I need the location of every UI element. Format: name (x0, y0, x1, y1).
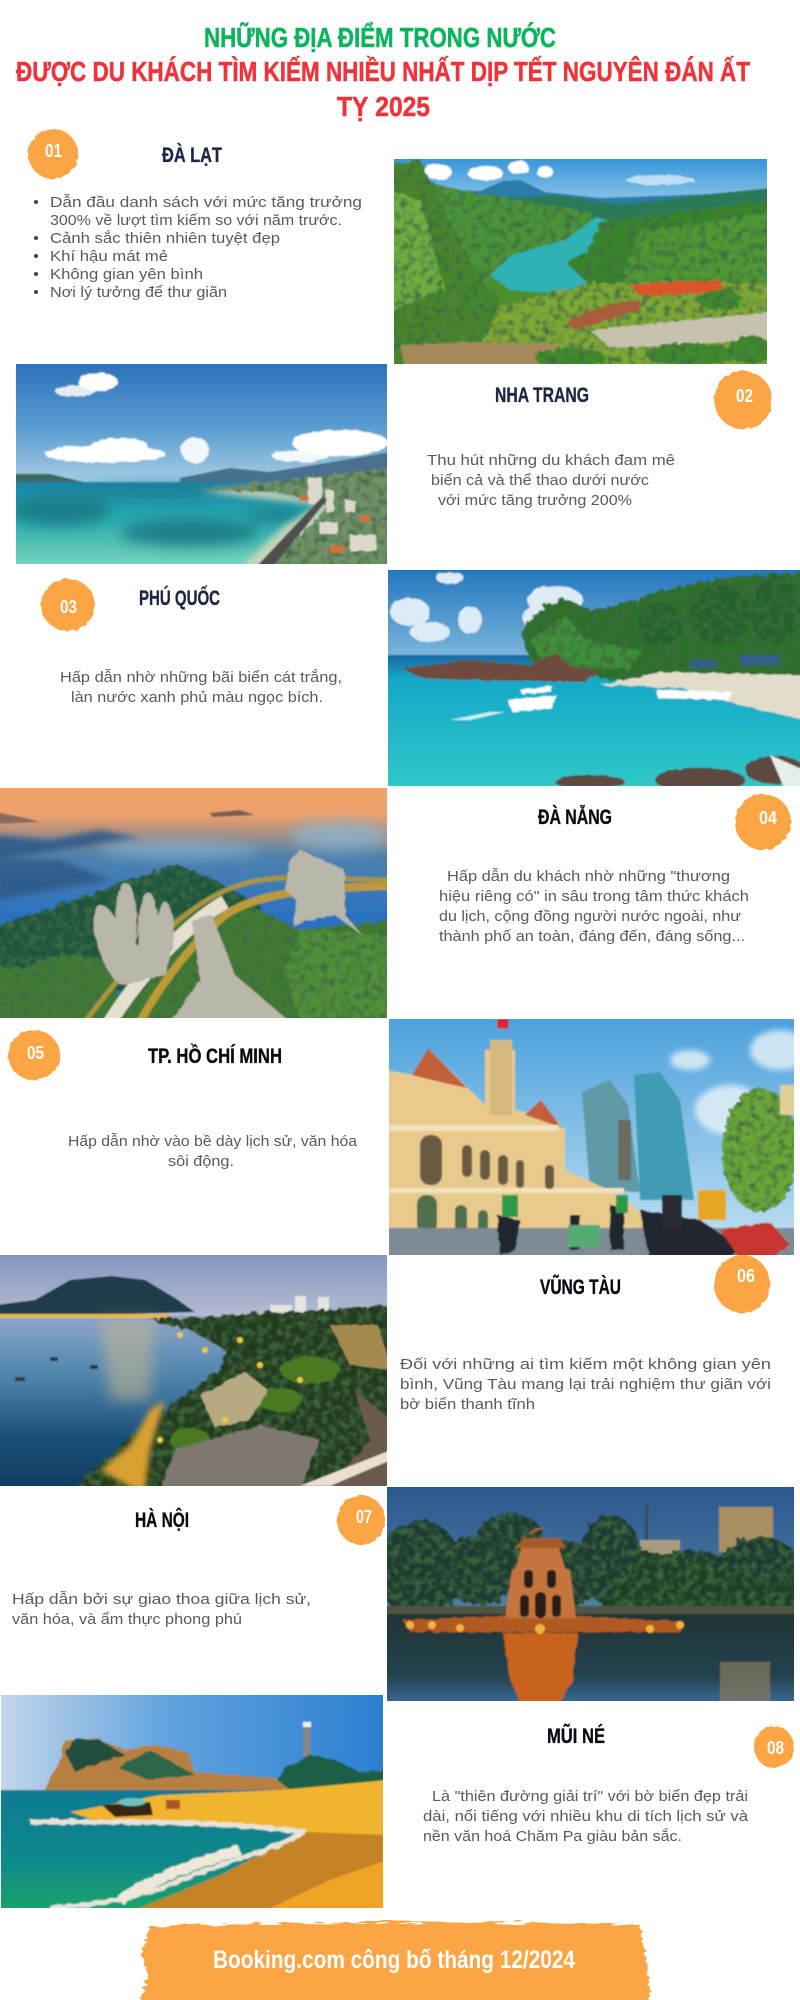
bullet list: Không gian yên bình (50, 267, 203, 283)
panel: Nha Trang (10, 360, 772, 568)
bullet list (34, 194, 362, 301)
badge 04: 04 (759, 808, 777, 828)
photo: City Hall (385, 1015, 800, 1259)
body text (439, 868, 749, 945)
heading TP. Hồ Chí Minh: TP. HỒ CHÍ MINH (148, 1044, 282, 1068)
badge 01: 01 (45, 141, 62, 161)
photo: Vũng Tàu night (0, 1251, 391, 1490)
body text: nền văn hoá Chăm Pa giàu bản sắc. (423, 1828, 682, 1845)
photo: Đà Lạt lake (390, 155, 772, 368)
badge 07 (337, 1495, 385, 1545)
badge 05: 05 (27, 1043, 44, 1063)
body text (60, 669, 342, 706)
bullet list: Nơi lý tưởng để thư giãn (50, 285, 227, 301)
body text: văn hóa, và ẩm thực phong phú (12, 1612, 242, 1628)
photo: Golden Bridge (0, 784, 391, 1022)
heading Mũi Né: MŨI NÉ (547, 1724, 605, 1748)
bullet list: Khí hậu mát mẻ (50, 249, 168, 265)
photo: Mũi Né beach (0, 1691, 387, 1912)
photo: Phú Quốc beach (384, 566, 800, 792)
badge 07: 07 (356, 1507, 372, 1527)
heading Vũng Tàu: VŨNG TÀU (540, 1275, 621, 1299)
body text: với mức tăng trưởng 200% (438, 493, 632, 509)
body text: bình, Vũng Tàu mang lại trải nghiệm thư giãn với (400, 1377, 771, 1393)
footer banner (138, 1922, 650, 2000)
body text: biển cả và thể thao dưới nước (431, 473, 649, 489)
panel: Phú Quốc (41, 566, 800, 792)
badge 02 (714, 371, 772, 429)
badge 06: 06 (737, 1266, 755, 1286)
body text: thành phố an toàn, đáng đến, đáng sống... (439, 929, 745, 945)
body text (12, 1591, 311, 1628)
footer banner: Booking.com công bố tháng 12/2024 (213, 1946, 575, 1974)
body text (427, 453, 675, 509)
panel: Hà Nội (12, 1483, 800, 1705)
heading Đà Nẵng: ĐÀ NẴNG (538, 806, 612, 829)
body text: sôi động. (168, 1154, 234, 1170)
body text: Thu hút những du khách đam mê (427, 453, 675, 469)
body text: làn nước xanh phủ màu ngọc bích. (71, 690, 323, 706)
panel: Mũi Né (0, 1691, 794, 1912)
body text: hiệu riêng có" in sâu trong tâm thức khách (439, 889, 749, 905)
badge 01 (28, 129, 78, 179)
panel: Vũng Tàu (0, 1251, 771, 1490)
body text: Hấp dẫn du khách nhờ những "thương (447, 868, 730, 885)
badge 08 (754, 1726, 794, 1768)
badge 02: 02 (736, 386, 753, 406)
title: NHỮNG ĐỊA ĐIỂM TRONG NƯỚC (204, 22, 556, 53)
panel: Đà Lạt (28, 129, 772, 368)
body text: bờ biển thanh tĩnh (400, 1397, 535, 1413)
body text: dài, nổi tiếng với nhiều khu di tích lịch sử và (423, 1809, 749, 1825)
panel: TP. Hồ Chí Minh (8, 1015, 800, 1259)
heading Nha Trang: NHA TRANG (495, 384, 589, 407)
body text: Hấp dẫn nhờ vào bề dày lịch sử, văn hóa (68, 1133, 358, 1150)
body text (400, 1357, 771, 1413)
badge 05 (8, 1030, 60, 1080)
heading Đà Lạt: ĐÀ LẠT (162, 144, 222, 167)
heading Hà Nội: HÀ NỘI (135, 1508, 189, 1532)
badge 08: 08 (767, 1738, 784, 1758)
badge 03 (41, 579, 95, 631)
panel: Đà Nẵng (0, 784, 791, 1022)
bullet list: Cảnh sắc thiên nhiên tuyệt đẹp (50, 230, 280, 247)
badge 03: 03 (60, 597, 77, 617)
title (16, 22, 750, 122)
body text: Đối với những ai tìm kiếm một không gian yên (400, 1357, 771, 1373)
title: TỴ 2025 (337, 91, 430, 122)
bullet list: 300% về lượt tìm kiếm so với năm trước. (50, 213, 342, 229)
bullet list: Dẫn đầu danh sách với mức tăng trưởng (50, 194, 362, 211)
body text (423, 1789, 749, 1845)
body text: Hấp dẫn bởi sự giao thoa giữa lịch sử, (12, 1591, 311, 1608)
badge 04 (735, 794, 791, 850)
badge 06 (714, 1255, 770, 1313)
body text: du lịch, cộng đồng người nước ngoài, như (439, 909, 741, 925)
body text: Hấp dẫn nhờ những bãi biển cát trắng, (60, 669, 342, 686)
photo: Turtle Tower (378, 1483, 800, 1705)
body text (68, 1133, 358, 1170)
heading Phú Quốc: PHÚ QUỐC (139, 586, 220, 610)
photo: Nha Trang bay (10, 360, 391, 568)
body text: Là "thiên đường giải trí" với bờ biển đẹp trải (432, 1789, 748, 1805)
